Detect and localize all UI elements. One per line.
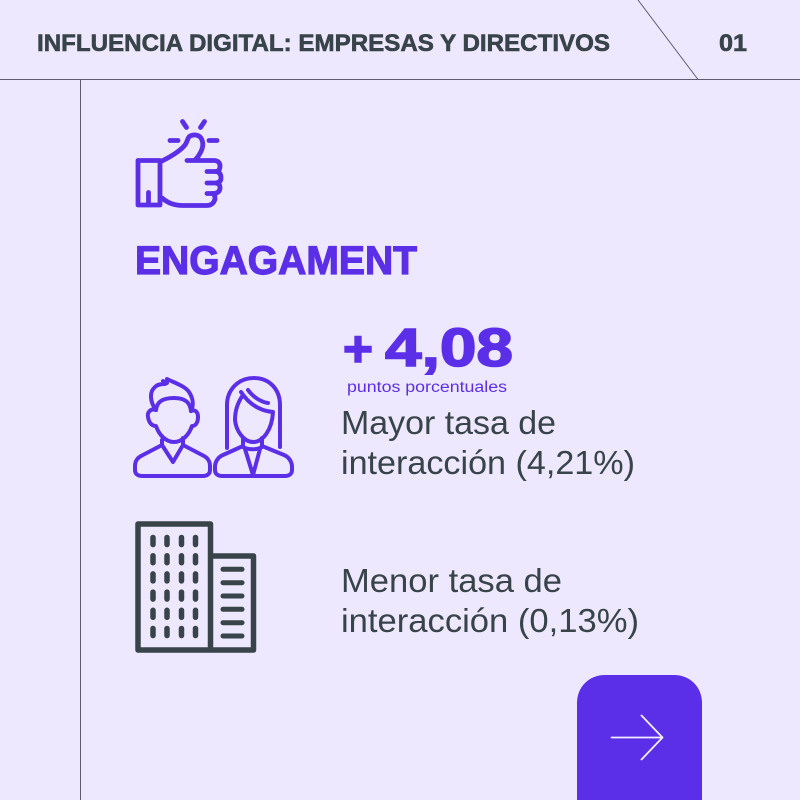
icon: executives (135, 378, 292, 476)
icon: office buildings (138, 524, 254, 650)
man (135, 379, 210, 476)
arrow (612, 716, 662, 760)
stat: percentage-point difference: 4,08 (385, 318, 513, 378)
stat unit: puntos porcentuales (347, 379, 507, 396)
label: lower interaction rate: interacción (0,13%) (341, 602, 639, 639)
stat: percentage-point difference: + (343, 321, 373, 377)
page number: 01 (719, 30, 747, 57)
label: lower interaction rate (341, 562, 639, 639)
heading: engagement: ENGAGAMENT (135, 239, 417, 283)
label: lower interaction rate: Menor tasa de (341, 562, 562, 599)
label: higher interaction rate: Mayor tasa de (341, 404, 556, 441)
label: higher interaction rate (341, 404, 635, 481)
next button (577, 675, 702, 800)
woman (215, 378, 292, 476)
label: higher interaction rate: interacción (4,21%) (341, 444, 635, 481)
icon: thumbs up (138, 122, 221, 206)
header title: INFLUENCIA DIGITAL: EMPRESAS Y DIRECTIVOS (37, 30, 610, 57)
stat: percentage-point difference (343, 318, 513, 378)
